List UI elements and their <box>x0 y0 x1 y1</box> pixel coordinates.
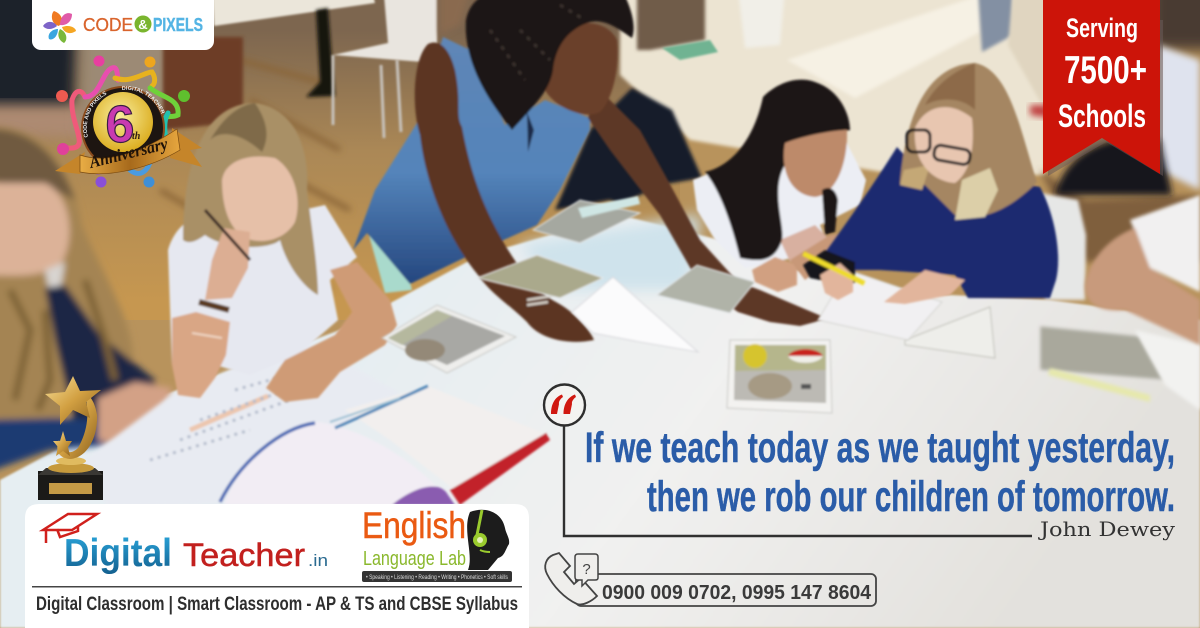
banner: serving 7500+ schools <box>1043 0 1163 176</box>
logo: Digital Teacher <box>43 514 328 575</box>
teal booklet <box>578 196 640 218</box>
table reflection <box>520 215 700 290</box>
icon: telephone <box>545 553 597 604</box>
girl with blond hair <box>168 103 397 402</box>
table items <box>382 196 1200 413</box>
phone contact <box>545 553 876 606</box>
tablet: centre back <box>477 255 603 298</box>
tablet: right centre <box>657 265 755 313</box>
tagline: Digital Classroom | Smart Classroom - AP & TS and CBSE Syllabus <box>36 594 518 615</box>
wordmark: & <box>138 17 148 32</box>
phone numbers: 0900 009 0702, 0995 147 8604 <box>602 582 872 604</box>
girl with glasses <box>802 63 1058 304</box>
worksheet on the right <box>818 270 942 340</box>
icon: question bubble <box>575 554 598 586</box>
wordmark: PIXELS <box>153 15 203 35</box>
background: floor and furniture <box>0 0 1200 320</box>
girl on far left <box>0 126 172 475</box>
quote text <box>585 424 1175 521</box>
open book on the table <box>80 338 550 510</box>
icon: head with headset <box>467 510 509 570</box>
folded paper <box>572 277 698 352</box>
teacher <box>353 0 826 342</box>
gold medallion <box>82 87 164 169</box>
icon: trophy <box>38 376 103 500</box>
person at right edge <box>1085 195 1200 345</box>
wordmark <box>83 15 203 35</box>
notebook on the right <box>905 307 995 358</box>
icon: quotation mark <box>544 384 585 426</box>
tablet: far right <box>1040 326 1165 380</box>
quote bracket line <box>564 425 1032 536</box>
logo panel: Code and Pixels <box>32 0 214 50</box>
people swirl <box>68 68 178 173</box>
main white table <box>0 215 1200 628</box>
anniversary ribbon <box>55 152 85 174</box>
logo: Digital Teacher: Teacher <box>183 537 305 573</box>
tablet: back <box>533 200 640 243</box>
white chair behind the girl with glasses <box>1040 193 1086 300</box>
quote block <box>544 384 1176 541</box>
banner: serving 7500+ schools: Serving <box>1066 13 1138 43</box>
wordmark: CODE <box>83 15 133 35</box>
skills bar: • Speaking • Listening • Reading • Writing • Phonetics • Soft skills <box>366 575 508 581</box>
number box <box>576 574 876 606</box>
tablet: fractions <box>382 305 516 373</box>
logo: Digital Teacher: Digital <box>64 532 172 575</box>
logo: English Language Lab: English <box>362 505 466 546</box>
skills bar <box>362 571 512 582</box>
banner: serving 7500+ schools: Schools <box>1058 98 1146 134</box>
brand panel: Digital Teacher and English Language Lab <box>25 504 529 628</box>
6th anniversary badge: Anniversary <box>86 134 170 172</box>
6th anniversary badge <box>55 56 202 188</box>
tablet: front with pie charts <box>727 340 832 413</box>
icon: pinwheel <box>43 11 76 43</box>
girl with dark hair <box>693 80 866 292</box>
logo: English Language Lab: Language Lab <box>363 548 466 570</box>
icon: question bubble: ? <box>582 561 591 578</box>
logo: Digital Teacher: .in <box>308 551 328 570</box>
6th anniversary badge: th <box>132 131 141 142</box>
6th anniversary badge: CODE AND PIXELS <box>82 91 106 138</box>
logo: English Language Lab <box>362 505 512 582</box>
banner: serving 7500+ schools: 7500+ <box>1064 49 1147 92</box>
attribution: John Dewey <box>1038 517 1176 541</box>
icon: graduation cap <box>43 514 97 543</box>
boy in dark sweater behind the teacher <box>555 88 702 210</box>
numeral 6th: 6 <box>106 96 134 154</box>
6th anniversary badge: DIGITAL TEACHER <box>122 86 165 114</box>
